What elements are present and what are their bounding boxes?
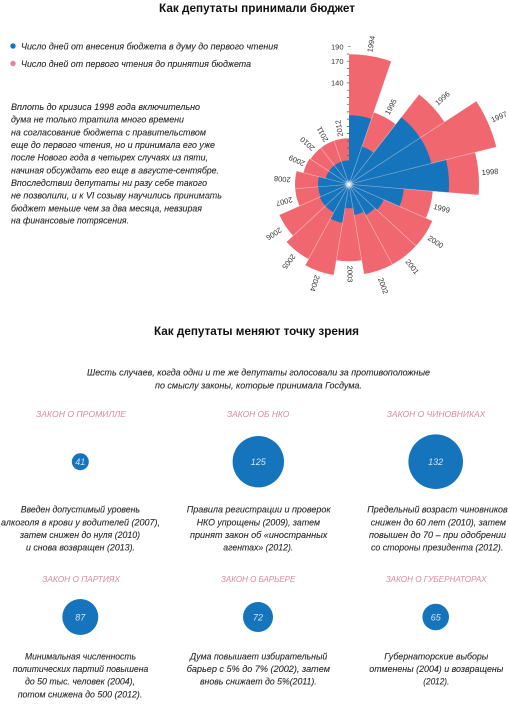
axis: value scale: 190 — [331, 42, 344, 52]
year labels: 2005 — [280, 252, 298, 271]
bubble: 132: 132 — [428, 457, 443, 467]
text block: budget commentary: не позволили, и к VI созыву научились принимать — [11, 191, 222, 202]
description: вновь снижает до 5%(2011). — [200, 677, 317, 688]
description: повышен до 70 – при одобрении — [369, 530, 507, 541]
description: отменены (2004) и возвращены — [369, 664, 503, 675]
text block: budget commentary: Впоследствии депутаты ни разу себе такого — [11, 178, 207, 189]
description — [187, 505, 331, 554]
description: до 50 тыс. человек (2004), — [25, 677, 135, 688]
text block: budget commentary: на согласование бюджета с правительством — [11, 127, 206, 138]
description: Губернаторские выборы — [384, 651, 488, 662]
panel: promille law — [1, 409, 160, 554]
description: барьер с 5% до 7% (2002), затем — [187, 664, 330, 675]
legend: budget chart — [10, 42, 278, 70]
description: Введен допустимый уровень — [21, 505, 140, 516]
text block: intro — [87, 368, 430, 392]
description: и снова возвращен (2013). — [26, 543, 135, 554]
text block: intro: Шесть случаев, когда одни и те же депутаты голосовали за противоположные — [87, 368, 430, 379]
bubble: 125: 125 — [251, 457, 267, 467]
text block: budget commentary: на финансовые потрясения. — [11, 216, 129, 227]
year labels: 1994 — [365, 35, 377, 53]
heading: ЗАКОН О ПРОМИЛЛЕ — [36, 409, 126, 419]
description — [187, 651, 330, 688]
year labels: 1999 — [432, 202, 451, 215]
description: Дума повышает избирательный — [189, 651, 328, 662]
year labels: 2012 — [333, 119, 345, 137]
title: budget: Как депутаты принимали бюджет — [159, 1, 355, 15]
heading: ЗАКОН О ГУБЕРНАТОРАХ — [386, 574, 487, 584]
panel: governors law — [369, 574, 503, 688]
text block: budget commentary: после Нового года в четырех случаях из пяти, — [11, 153, 208, 164]
legend item: days to adoption: Число дней от первого чтения до принятия бюджета — [21, 59, 251, 70]
year labels: 2010 — [298, 135, 317, 153]
year labels: 2007 — [275, 195, 293, 208]
year labels — [264, 35, 509, 295]
year labels: 2004 — [308, 274, 322, 293]
heading: ЗАКОН О ПАРТИЯХ — [42, 574, 120, 584]
description: алкоголя в крови у водителей (2007), — [1, 517, 160, 528]
year labels: 2009 — [287, 153, 306, 168]
panel: NGO law — [187, 409, 331, 554]
blue segments: submission to first reading — [317, 115, 454, 223]
heading: ЗАКОН ОБ НКО — [227, 409, 290, 419]
panel: parties law — [13, 574, 148, 700]
year labels: 2003 — [345, 266, 354, 282]
description — [367, 505, 508, 554]
panel: officials law — [367, 409, 508, 554]
year labels: 1995 — [383, 97, 399, 116]
text block: budget commentary: начиная обсуждать его еще в августе-сентябре. — [11, 165, 219, 176]
text block: intro: по смыслу законы, которые принимала Госдума. — [155, 381, 362, 392]
bubble: 125 — [233, 436, 284, 487]
year labels: 2001 — [403, 257, 421, 276]
year labels: 1996 — [433, 89, 452, 107]
year labels: 2011 — [315, 125, 330, 143]
year labels: 1998 — [481, 167, 499, 177]
bubble: 65: 65 — [431, 612, 442, 622]
text block: budget commentary: еще до первого чтения, но и принимала его уже — [11, 140, 215, 151]
description: политических партий повышена — [13, 664, 148, 675]
legend item: days to first reading: Число дней от внесения бюджета в думу до первого чтения — [21, 42, 278, 52]
bubble: 41: 41 — [75, 457, 85, 467]
year labels: 2008 — [274, 174, 291, 184]
description — [13, 651, 148, 700]
description: Правила регистрации и проверок — [187, 505, 331, 516]
bubble: 41 — [72, 453, 89, 470]
bubble: 87: 87 — [75, 612, 86, 622]
bubble: 72: 72 — [253, 612, 263, 622]
panel: barrier law — [187, 574, 330, 688]
text block: budget commentary: бюджет меньше чем за два месяца, невзирая — [11, 203, 202, 214]
text block: budget commentary: Вплоть до кризиса 1998 года включительно — [11, 102, 200, 113]
axis: value scale: 140 — [331, 79, 344, 88]
title: changing views: Как депутаты меняют точку зрения — [154, 324, 359, 338]
description: затем снижен до нуля (2010) — [19, 530, 140, 541]
year labels: 2006 — [264, 225, 283, 242]
description: агентах» (2012). — [223, 543, 293, 554]
year labels: 1997 — [490, 109, 509, 124]
description: (2012). — [423, 677, 449, 688]
bubble: 132 — [408, 434, 463, 489]
description — [1, 505, 160, 554]
axis: value scale — [331, 42, 351, 155]
polar chart: budget days by year — [195, 35, 509, 337]
description — [369, 651, 503, 688]
text block: budget commentary: дума не только тратила много времени — [11, 115, 185, 126]
axis: value scale: 170 — [331, 57, 344, 66]
pink segments: first reading to adoption — [276, 54, 503, 278]
description: потом снижена до 500 (2012). — [18, 689, 142, 700]
description: Минимальная численность — [25, 651, 136, 662]
year labels: 2002 — [376, 276, 390, 295]
text block: budget commentary — [11, 102, 222, 227]
description: НКО упрощены (2009), затем — [197, 517, 320, 528]
bubble: 72 — [243, 602, 273, 632]
year labels: 2000 — [426, 234, 445, 250]
heading: ЗАКОН О БАРЬЕРЕ — [221, 574, 296, 584]
description: принят закон об «иностранных — [190, 530, 328, 541]
heading: ЗАКОН О ЧИНОВНИКАХ — [387, 409, 486, 419]
